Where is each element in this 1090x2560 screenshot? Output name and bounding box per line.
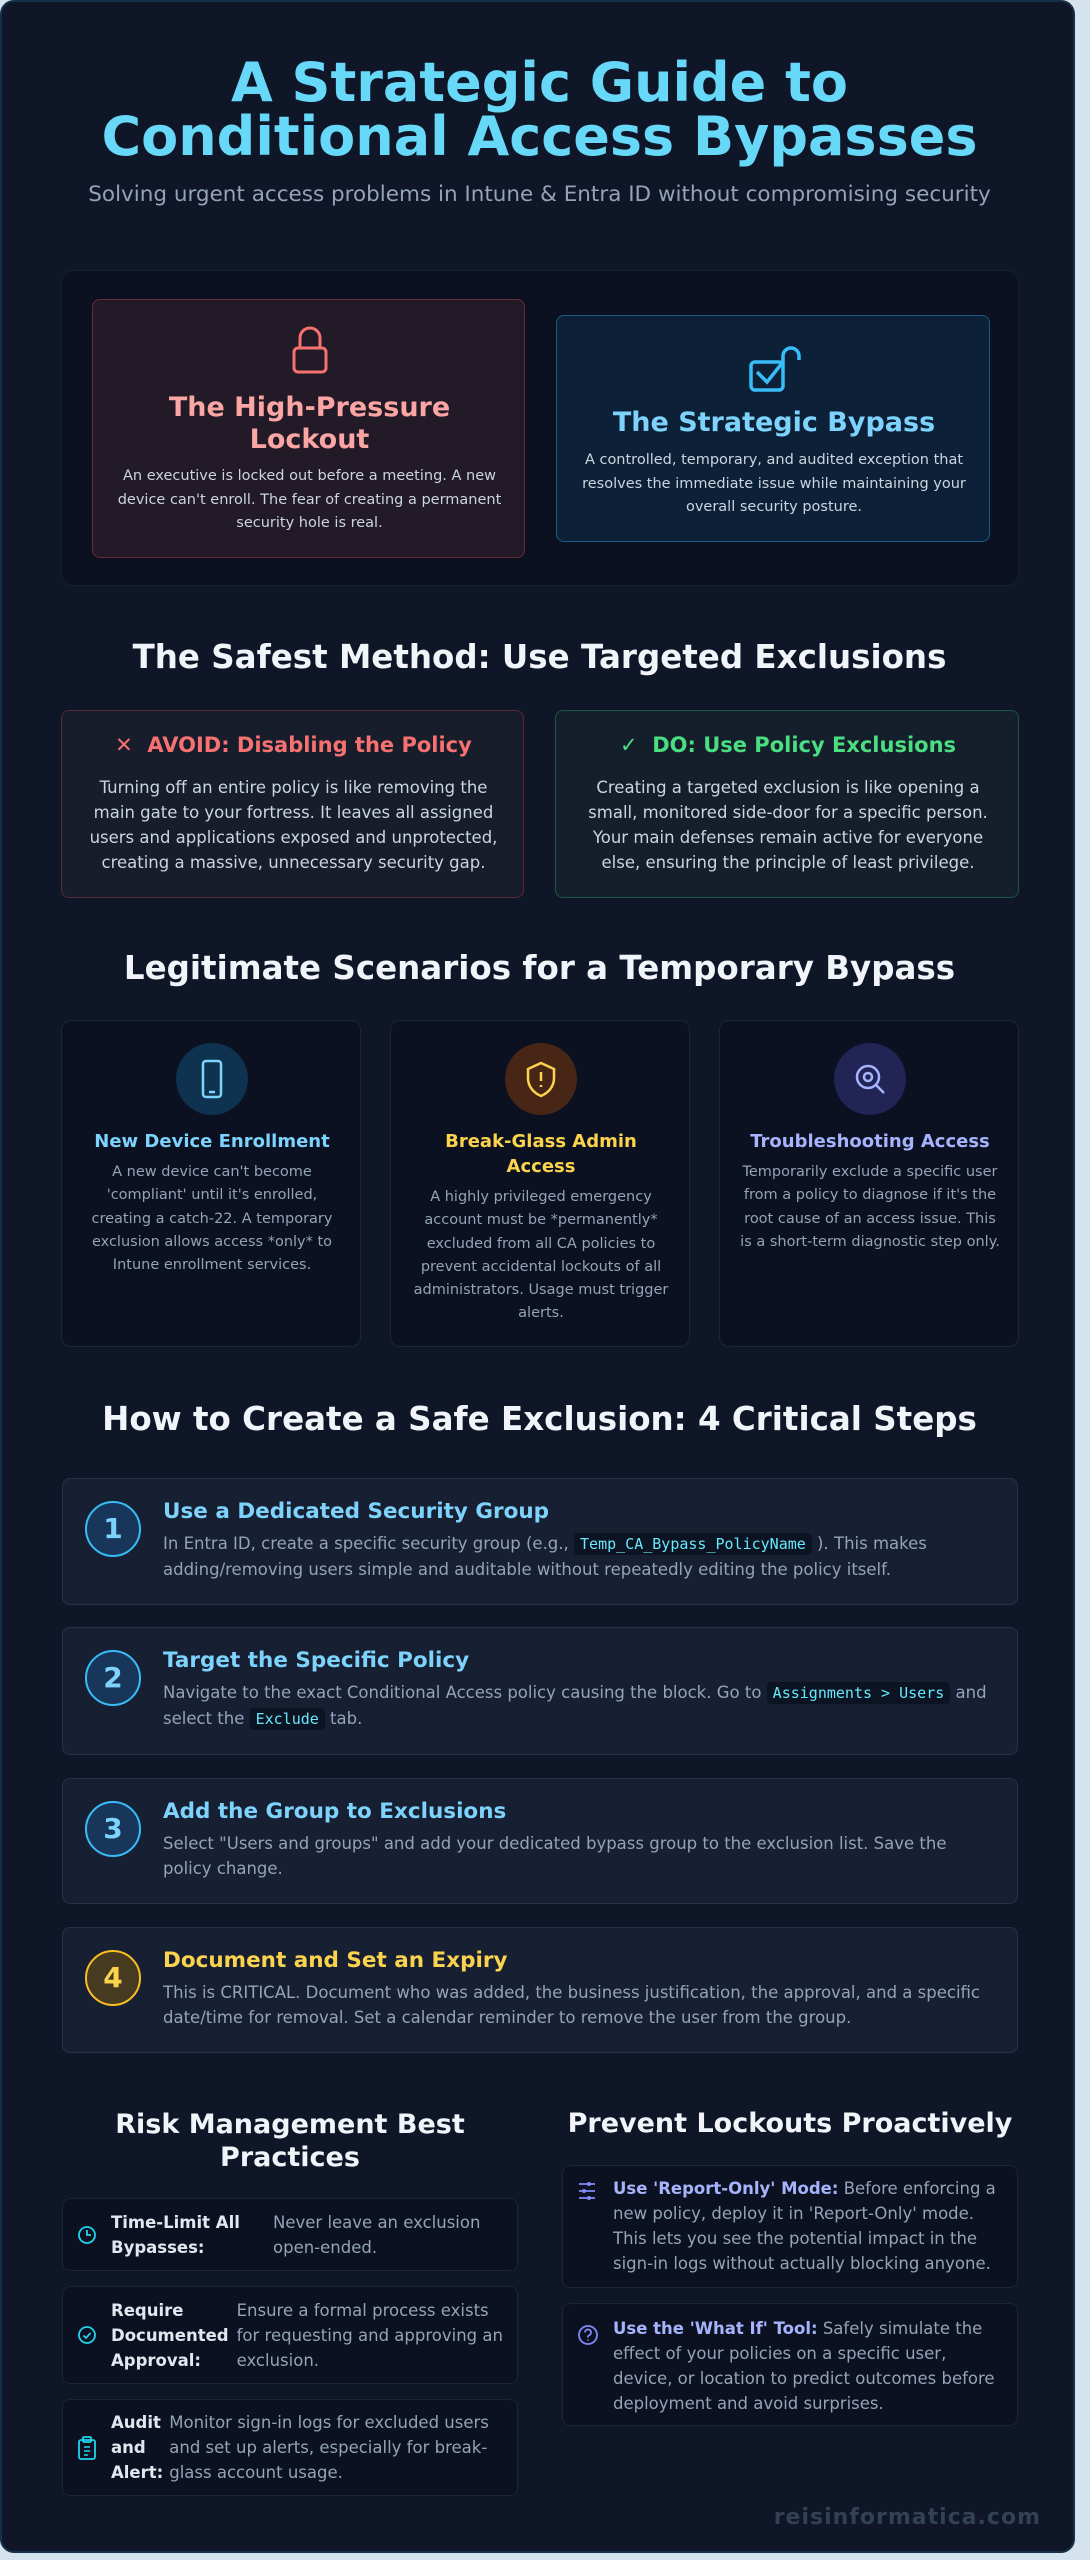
- step 3: [62, 1778, 1018, 1904]
- card: strategic bypass: [556, 315, 990, 542]
- step 2: [62, 1627, 1018, 1755]
- number: [85, 1650, 141, 1706]
- icon: lock: [292, 326, 328, 374]
- heading: Lockout: [250, 424, 369, 455]
- text: A new device can't become 'compliant' until it's enrolled, creating a catch-22. A temporary exclusion allows access *only* to Intune enrollment services.: [92, 1164, 332, 1273]
- card: do: [555, 710, 1019, 898]
- title: [102, 51, 977, 168]
- heading: ✕ AVOID: Disabling the Policy: [115, 733, 472, 757]
- title: Break-Glass Admin Access: [445, 1131, 637, 1177]
- icon: sliders: [579, 2182, 595, 2200]
- number: [85, 1501, 141, 1557]
- card: high-pressure lockout: [92, 299, 525, 558]
- title: Document and Set an Expiry: [163, 1948, 507, 1973]
- heading: [169, 392, 450, 455]
- practice: audit: and: [111, 2438, 146, 2457]
- practice: time-limit: Never leave an exclusion open-ended.: [273, 2212, 480, 2256]
- heading: The High-Pressure: [169, 392, 450, 423]
- text: A highly privileged emergency account must be *permanently* excluded from all CA policies to prevent accidental lockouts of all administrators. Usage must trigger alerts.: [414, 1189, 668, 1321]
- title: New Device Enrollment: [94, 1131, 330, 1152]
- title: Target the Specific Policy: [163, 1648, 469, 1673]
- heading: ✓ DO: Use Policy Exclusions: [620, 733, 956, 757]
- step 1: [62, 1478, 1018, 1605]
- text: Temporarily exclude a specific user from a policy to diagnose if it's the root cause of an access issue. This is a short-term diagnostic step only.: [740, 1164, 1000, 1250]
- practice: approval: Require: [111, 2300, 183, 2320]
- text: Navigate to the exact Conditional Access policy causing the block. Go to Assignments > Users and select the Exclude tab.: [163, 1683, 987, 1728]
- text: Turning off an entire policy is like removing the main gate to your fortress. It leaves all assigned users and applications exposed and unprotected, creating a massive, unnecessary security gap.: [90, 778, 497, 872]
- heading: prevent lockouts: Prevent Lockouts Proactively: [568, 2108, 1012, 2139]
- practice: audit: Monitor sign-in logs for excluded users and set up alerts, especially for break-glass account usage.: [169, 2413, 489, 2482]
- practice: audit: [62, 2399, 518, 2496]
- practice: audit: Alert:: [111, 2463, 163, 2482]
- title: Use a Dedicated Security Group: [163, 1499, 549, 1524]
- text: A controlled, temporary, and audited exception that resolves the immediate issue while maintaining your overall security posture.: [582, 452, 966, 515]
- subtitle: Solving urgent access problems in Intune & Entra ID without compromising security: [88, 182, 991, 207]
- practice: audit: Audit: [111, 2413, 161, 2432]
- practice: approval: [62, 2286, 518, 2384]
- icon: clipboard: [78, 2436, 96, 2460]
- title: Troubleshooting Access: [750, 1131, 990, 1152]
- number: 1: [103, 1512, 123, 1545]
- text: This is CRITICAL. Document who was added, the business justification, the approval, and a specific date/time for removal. Set a calendar reminder to remove the user from the group.: [163, 1983, 980, 2027]
- tip: what if: [562, 2303, 1018, 2426]
- number: [85, 1950, 141, 2006]
- number: 4: [103, 1961, 123, 1994]
- heading: scenarios: Legitimate Scenarios for a Temporary Bypass: [124, 949, 955, 987]
- icon: search: [834, 1043, 906, 1115]
- practice: approval: Approval:: [111, 2350, 201, 2370]
- icon: check circle: [78, 2326, 96, 2344]
- practice: approval: Ensure a formal process exists for requesting and approving an exclusion.: [237, 2300, 503, 2370]
- text: Select "Users and groups" and add your dedicated bypass group to the exclusion list. Save the policy change.: [163, 1834, 947, 1878]
- text: In Entra ID, create a specific security group (e.g., Temp_CA_Bypass_PolicyName ). This makes adding/removing users simple and auditable without repeatedly editing the policy itself.: [163, 1534, 927, 1579]
- tip: report-only: [562, 2165, 1018, 2288]
- practice: time-limit: [62, 2198, 518, 2271]
- heading: steps: How to Create a Safe Exclusion: 4 Critical Steps: [102, 1400, 977, 1438]
- footer: brand: reisinformatica.com: [774, 2505, 1041, 2530]
- card: avoid: [61, 710, 524, 898]
- icon: unlock check: [749, 346, 801, 392]
- number: 3: [103, 1812, 123, 1845]
- number: 2: [103, 1661, 123, 1694]
- title: Conditional Access Bypasses: [102, 105, 977, 168]
- heading: The Strategic Bypass: [613, 407, 935, 438]
- scenario: break-glass: [390, 1020, 690, 1347]
- text: An executive is locked out before a meeting. A new device can't enroll. The fear of creating a permanent security hole is real.: [118, 468, 501, 531]
- icon: clock: [78, 2226, 96, 2244]
- text: Creating a targeted exclusion is like opening a small, monitored side-door for a specific person. Your main defenses remain active for everyone else, ensuring the principle of least privilege.: [588, 778, 988, 872]
- tip: report-only: Use 'Report-Only' Mode: Before enforcing a new policy, deploy it in 'Report-Only' mode. This lets you see the potential impact in the sign-in logs without actually blocking anyone.: [613, 2179, 996, 2273]
- tip: what if: Use the 'What If' Tool: Safely simulate the effect of your policies on a specific user, device, or location to predict outcomes before deployment and avoid surprises.: [613, 2319, 995, 2413]
- icon: shield: [505, 1043, 577, 1115]
- scenario: new device: [61, 1020, 361, 1347]
- icon: question: [578, 2325, 598, 2345]
- scenario: troubleshooting: [719, 1020, 1019, 1347]
- title: Add the Group to Exclusions: [163, 1799, 506, 1824]
- heading: safest method: The Safest Method: Use Targeted Exclusions: [133, 638, 946, 676]
- number: [85, 1801, 141, 1857]
- panel: problem vs solution: [61, 270, 1019, 586]
- icon: phone: [176, 1043, 248, 1115]
- step 4: [62, 1927, 1018, 2053]
- practice: approval: Documented: [111, 2326, 229, 2344]
- title: A Strategic Guide to: [231, 51, 848, 114]
- heading: risk management: Risk Management Best Practices: [115, 2109, 465, 2173]
- practice: time-limit: Time-Limit All Bypasses:: [111, 2212, 240, 2256]
